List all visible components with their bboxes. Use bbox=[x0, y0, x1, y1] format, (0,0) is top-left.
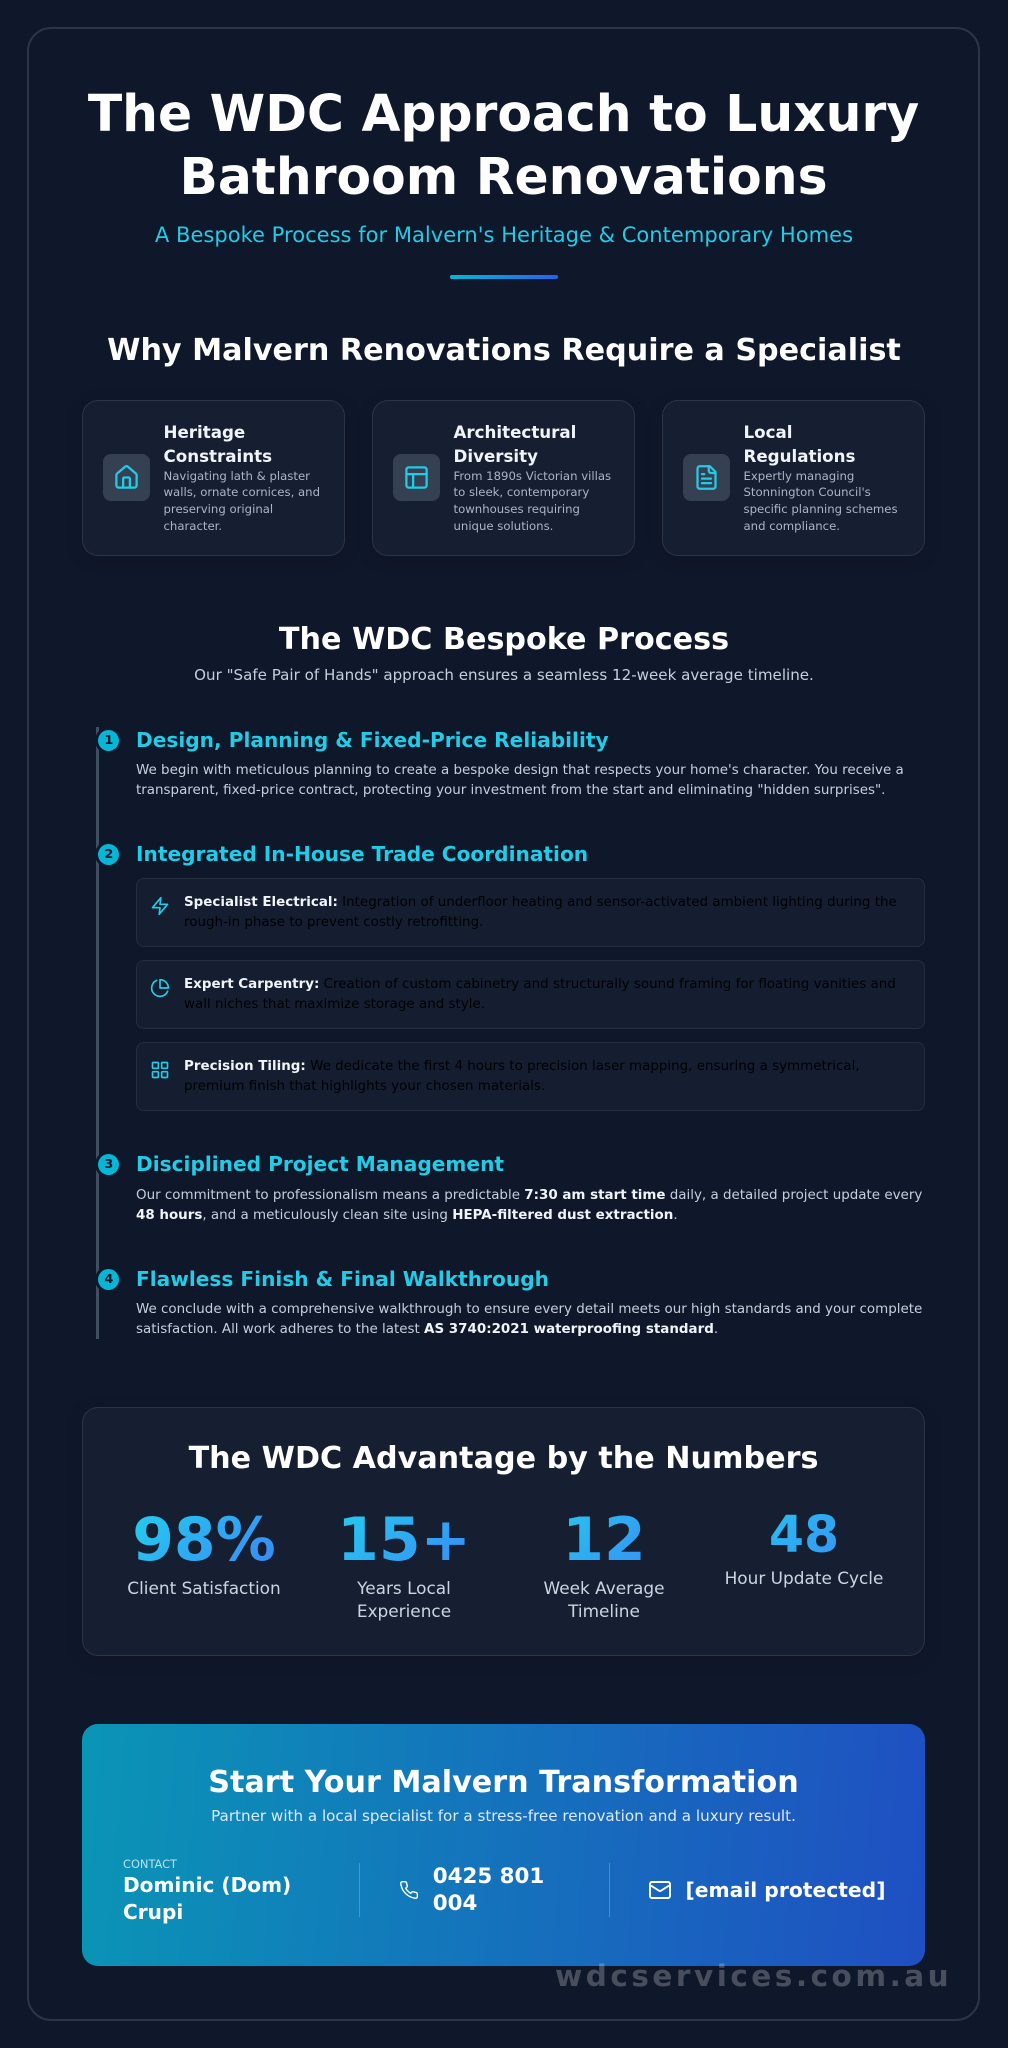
title: The WDC Approach to Luxury bbox=[88, 84, 919, 142]
step number: 4 bbox=[104, 1272, 113, 1286]
stat: update cycle bbox=[725, 1505, 883, 1588]
stat label: Timeline bbox=[568, 1601, 640, 1621]
trade text: premium finish that highlights your chosen materials. bbox=[184, 1079, 545, 1094]
stat number: 15+ bbox=[337, 1504, 471, 1574]
step 3 bbox=[96, 1152, 922, 1223]
step number bbox=[98, 844, 119, 864]
card text: and compliance. bbox=[744, 519, 840, 533]
card text: specific planning schemes bbox=[744, 502, 898, 516]
stat label: Client Satisfaction bbox=[127, 1578, 281, 1598]
step text: 48 hours, and a meticulously clean site using HEPA-filtered dust extraction. bbox=[136, 1208, 678, 1223]
cta text: Partner with a local specialist for a stress-free renovation and a luxury result. bbox=[211, 1807, 796, 1825]
step 4 bbox=[96, 1267, 922, 1337]
contact label: CONTACT bbox=[123, 1857, 177, 1871]
stat: experience bbox=[337, 1504, 471, 1621]
timeline line bbox=[96, 727, 99, 1339]
step text: We begin with meticulous planning to create a bespoke design that respects your home's character. You receive a bbox=[136, 763, 904, 778]
card: local regulations bbox=[662, 400, 925, 556]
accent divider bbox=[450, 275, 558, 279]
card title bbox=[744, 422, 855, 466]
step text bbox=[136, 1302, 922, 1337]
heading: why specialist: Why Malvern Renovations Require a Specialist bbox=[107, 332, 901, 368]
card text bbox=[164, 469, 320, 533]
stat: satisfaction bbox=[127, 1504, 281, 1598]
subtitle: A Bespoke Process for Malvern's Heritage & Contemporary Homes bbox=[155, 222, 853, 247]
stat label: Experience bbox=[357, 1601, 451, 1621]
title: Bathroom Renovations bbox=[179, 146, 828, 206]
card title bbox=[164, 422, 272, 466]
card text: walls, ornate cornices, and bbox=[164, 485, 320, 499]
panel: call to action bbox=[82, 1724, 925, 1966]
card text bbox=[744, 469, 898, 533]
step text: We conclude with a comprehensive walkthrough to ensure every detail meets our high standards and your complete bbox=[136, 1302, 922, 1317]
step title: Flawless Finish & Final Walkthrough bbox=[136, 1267, 549, 1291]
email: [email protected] bbox=[686, 1878, 885, 1902]
trade text: Expert Carpentry: Creation of custom cabinetry and structurally sound framing for floating vanities and bbox=[184, 977, 896, 992]
card text: Navigating lath & plaster bbox=[164, 469, 310, 483]
card text: From 1890s Victorian villas bbox=[454, 469, 611, 483]
divider bbox=[609, 1863, 610, 1917]
contact name: Dominic (Dom) bbox=[123, 1872, 291, 1896]
card title: Local bbox=[744, 422, 792, 442]
step number: 2 bbox=[104, 846, 113, 862]
trade card: electrical bbox=[136, 878, 925, 946]
card text: to sleek, contemporary bbox=[454, 485, 589, 499]
card text: unique solutions. bbox=[454, 519, 553, 533]
icon: pie chart bbox=[150, 978, 170, 998]
step text: Our commitment to professionalism means a predictable 7:30 am start time daily, a detailed project update every bbox=[136, 1188, 922, 1203]
icon: lightning bbox=[152, 896, 168, 916]
card text: preserving original bbox=[164, 502, 273, 516]
icon: document bbox=[683, 454, 730, 501]
card text: Stonnington Council's bbox=[744, 485, 871, 499]
cta heading: Start Your Malvern Transformation bbox=[208, 1764, 799, 1800]
step number bbox=[98, 1268, 119, 1290]
icon: layout bbox=[393, 454, 440, 501]
step number bbox=[98, 730, 119, 750]
stat label: Hour Update Cycle bbox=[725, 1568, 883, 1588]
step number: 1 bbox=[104, 732, 113, 748]
trade text bbox=[184, 1059, 860, 1094]
card title: Constraints bbox=[164, 446, 272, 466]
stat number: 12 bbox=[562, 1504, 646, 1574]
stat: timeline bbox=[543, 1504, 664, 1621]
trade text: Specialist Electrical: Integration of underfloor heating and sensor-activated ambient lighting during the bbox=[184, 895, 897, 910]
stat number bbox=[520, 1504, 688, 1574]
card title: Regulations bbox=[744, 446, 855, 466]
card text: Expertly managing bbox=[744, 469, 854, 483]
step number: 3 bbox=[104, 1156, 113, 1172]
card text: character. bbox=[164, 519, 222, 533]
divider bbox=[358, 1863, 360, 1917]
stat label bbox=[543, 1578, 664, 1621]
panel: stats bbox=[82, 1407, 925, 1656]
watermark: wdcservices.com.au bbox=[555, 1959, 952, 1993]
step text: transparent, fixed-price contract, protecting your investment from the start and eliminating "hidden surprises". bbox=[136, 783, 885, 798]
phone number bbox=[433, 1864, 544, 1916]
icon: mail bbox=[649, 1881, 671, 1899]
card: heritage constraints bbox=[82, 400, 345, 556]
stat number bbox=[720, 1500, 888, 1570]
title bbox=[88, 84, 919, 206]
trade text: Precision Tiling: We dedicate the first 4 hours to precision laser mapping, ensuring a symmetrical, bbox=[184, 1059, 860, 1074]
stat label: Week Average bbox=[543, 1578, 664, 1598]
process intro: Our "Safe Pair of Hands" approach ensures a seamless 12-week average timeline. bbox=[194, 666, 814, 684]
phone number: 0425 801 bbox=[433, 1864, 544, 1889]
card text bbox=[454, 469, 611, 533]
step title: Disciplined Project Management bbox=[136, 1152, 504, 1176]
card: architectural diversity bbox=[372, 400, 635, 556]
card text: townhouses requiring bbox=[454, 502, 580, 516]
stat label bbox=[357, 1578, 451, 1621]
trade text: rough-in phase to prevent costly retrofitting. bbox=[184, 915, 483, 930]
trade text bbox=[184, 895, 897, 930]
phone number: 004 bbox=[433, 1891, 477, 1916]
stat label: Years Local bbox=[357, 1578, 451, 1598]
trade card: tiling bbox=[136, 1042, 925, 1110]
card title: Heritage bbox=[164, 422, 245, 442]
step 1 bbox=[96, 728, 904, 798]
contact name: Crupi bbox=[123, 1900, 183, 1924]
card title: Diversity bbox=[454, 446, 538, 466]
contact name bbox=[123, 1872, 291, 1924]
header bbox=[88, 84, 919, 279]
step title: Integrated In-House Trade Coordination bbox=[136, 842, 588, 866]
stats heading: The WDC Advantage by the Numbers bbox=[189, 1440, 818, 1476]
icon: house bbox=[103, 454, 150, 501]
step text: satisfaction. All work adheres to the latest AS 3740:2021 waterproofing standard. bbox=[136, 1322, 718, 1337]
trade card: carpentry bbox=[136, 960, 925, 1028]
step text bbox=[136, 1188, 922, 1223]
icon: phone bbox=[400, 1881, 418, 1899]
step title: Design, Planning & Fixed-Price Reliability bbox=[136, 728, 609, 752]
stat number: 98% bbox=[132, 1504, 276, 1574]
card title: Architectural bbox=[454, 422, 576, 442]
heading: bespoke process: The WDC Bespoke Process bbox=[279, 622, 729, 657]
card title bbox=[454, 422, 576, 466]
step text bbox=[136, 763, 904, 798]
step number bbox=[98, 1154, 119, 1174]
step 2 bbox=[96, 842, 925, 1111]
stat number: 48 bbox=[769, 1505, 839, 1564]
trade text: wall niches that maximize storage and style. bbox=[184, 997, 485, 1012]
trade text bbox=[184, 977, 896, 1012]
icon: grid bbox=[152, 1062, 168, 1078]
